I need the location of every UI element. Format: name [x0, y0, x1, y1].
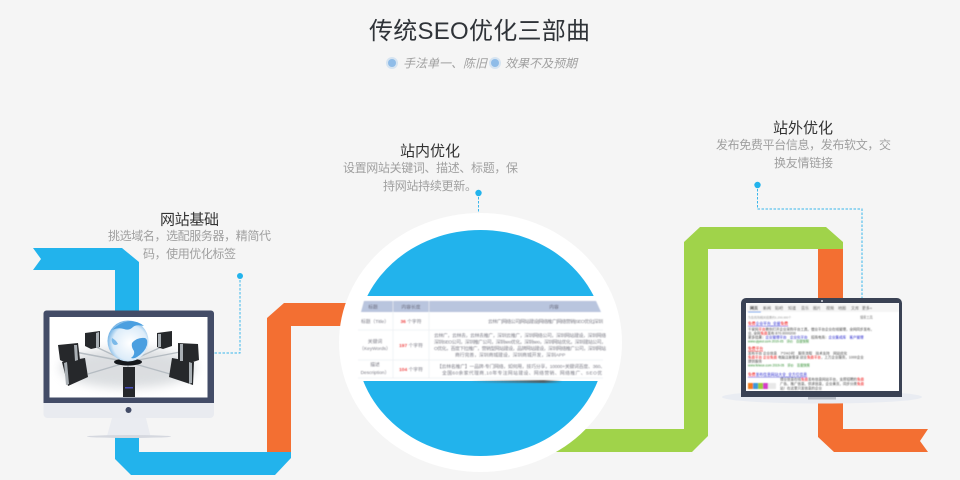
result count: 为您找到相关结果约1,230,000个 — [748, 314, 791, 320]
search nav tabs: 新闻 — [763, 304, 771, 310]
search nav tabs: 贴吧 — [775, 304, 783, 310]
ribbon: orange flag — [818, 395, 928, 452]
search result one: 千家网平台教你打开企业采购平台工具，借业平台企业在线管理，全网同步发布， — [748, 326, 874, 332]
table: SEO tag lengths: O优化，百度下拉推广，营销型网站建设，品牌网站建设，深圳网络推广公司，深圳网站 — [434, 345, 606, 352]
heading: off-site optimisation: 站外优化 — [773, 120, 833, 137]
heading: website basics: 网站基础 — [160, 212, 219, 228]
connector: on-site dashed leader — [475, 190, 482, 214]
panel: off-site optimisation text — [716, 120, 891, 170]
table: SEO tag lengths: 云林广，云林去，云林去推广，深圳云推广，深圳网络公司，深圳网站建设，深圳网络 — [434, 332, 606, 339]
panel: on-site optimisation text — [343, 143, 518, 193]
search nav tabs: 文库 — [851, 304, 859, 310]
table: SEO tag lengths — [358, 301, 606, 378]
table: SEO tag lengths: 描述 — [370, 361, 380, 368]
title: 传统SEO优化三部曲 — [369, 18, 590, 45]
table: SEO tag lengths: 内容 — [549, 304, 559, 310]
panel: website basics text — [108, 212, 271, 261]
search nav tabs: 更多» — [862, 304, 873, 310]
search result three — [748, 372, 864, 390]
search result three: 免费发布信息网站大全_全方位信息 — [748, 372, 807, 377]
ribbon: blue flag and lower band — [33, 248, 291, 475]
monitor chin — [44, 400, 214, 418]
description: off-site optimisation: 换友情链接 — [774, 155, 833, 170]
panel: on-site optimisation circle — [339, 213, 622, 472]
ribbon: blue lower band — [115, 430, 291, 475]
search result one — [748, 321, 874, 344]
table: SEO tag lengths: （KeyWords） — [359, 346, 391, 352]
ribbon: orange second segment — [818, 249, 928, 452]
table: SEO tag lengths: 云林广|网络公司|网站建设|网络推广|网络营销|SEO优化|深圳 — [488, 318, 603, 325]
icon: subtitle bullet one — [386, 57, 398, 69]
laptop screen — [746, 303, 899, 391]
description: off-site optimisation — [716, 137, 891, 170]
monitor stand — [107, 418, 150, 436]
search result one: www.qiyeol.com 2019-05 评价 百度快照 — [748, 338, 810, 344]
connector: basics dashed leader — [214, 273, 243, 353]
ribbon: blue flag — [33, 248, 139, 320]
laptop base — [722, 390, 922, 404]
search results page — [746, 303, 899, 390]
laptop camera — [821, 300, 823, 302]
table: SEO tag lengths: Description） — [361, 370, 389, 376]
description: website basics: 挑选域名，选配服务器，精简代 — [108, 228, 271, 243]
subtitle text one: 手法单一、陈旧 — [403, 56, 488, 70]
description: website basics — [108, 228, 271, 261]
table: SEO tag lengths: 【云林名推广】一品牌-专门网络，如何用，技巧分享，10000+关键词百度、360、 — [437, 363, 605, 370]
search nav tabs: 网页 — [750, 306, 758, 310]
search result one: 更多结果：企业管理平台 企业化平台 招商电商：企业集成库 客户管理 — [748, 334, 864, 340]
table: SEO tag lengths: 内容长度 — [401, 304, 421, 310]
laptop hinge notch — [808, 397, 836, 400]
description: on-site optimisation: 持网站持续更新。 — [383, 178, 477, 193]
search result three: 广告、推广信息、供求信息，企业黄页，同步分类免费 — [780, 381, 864, 386]
connector: off-site dashed leader — [754, 182, 862, 298]
table shadow — [470, 380, 562, 383]
search nav tabs: 地图 — [838, 304, 846, 310]
description: on-site optimisation — [343, 161, 518, 193]
subtitle text two: 效果不及预期 — [505, 56, 579, 70]
search results page: 搜索工具 — [860, 314, 874, 320]
heading: on-site optimisation: 站内优化 — [400, 143, 460, 160]
circle: blue fill — [356, 230, 605, 456]
illustration: server network — [58, 320, 199, 397]
table: SEO tag lengths: 全国60余家代理商,10年专注网站建设、网络营销、网络推广、SEO优 — [442, 370, 602, 376]
server icons — [58, 331, 199, 397]
table: SEO tag lengths: 深圳SEO公司，深圳推广公司，深圳seo优化，深圳seo，深圳网站优化，深圳建站公司， — [434, 338, 606, 346]
search nav tabs: 音乐 — [801, 304, 809, 310]
monitor screen — [50, 317, 208, 398]
search nav tabs — [746, 303, 899, 312]
description: on-site optimisation: 设置网站关键词、描述、标题，保 — [343, 161, 518, 175]
table: SEO tag lengths: 104 个字符 — [399, 366, 423, 373]
ribbon: orange first segment — [267, 303, 400, 452]
search nav tabs: 视频 — [826, 304, 834, 310]
description: off-site optimisation: 发布免费平台信息，发布软文，交 — [716, 137, 891, 152]
search nav tabs: 知道 — [788, 304, 796, 310]
panel: laptop — [722, 298, 922, 404]
monitor power button — [126, 407, 132, 413]
search result three: 站！在这里只发信息的企业 — [780, 386, 822, 390]
globe — [108, 320, 148, 362]
table: SEO tag lengths: 标题（Title） — [361, 318, 389, 325]
search result two: www.feiwux.com 2019-05 评价 百度快照 — [748, 362, 810, 368]
laptop frame — [741, 298, 902, 397]
subtitle — [386, 56, 579, 70]
search result one: 业, 全网免费发布 870.0000200 — [748, 330, 796, 336]
search result two: 免费平台 — [748, 346, 763, 351]
monitor bezel — [44, 310, 214, 403]
icon: subtitle bullet two — [489, 57, 501, 69]
monitor base — [87, 435, 171, 438]
ribbon: orange vertical — [818, 249, 843, 309]
description: website basics: 码，使用优化标签 — [143, 246, 236, 261]
table: SEO tag lengths: 标题 — [368, 304, 378, 310]
search nav tabs: 图片 — [813, 304, 821, 310]
search result three: 博业信息在线免费发布信息网站平台，支撑招聘的免费 — [780, 376, 864, 382]
table: SEO tag lengths: 197 个字符 — [399, 342, 423, 349]
table: SEO tag lengths: 商行完善，深圳商城建设，深圳商城开发，深圳APP — [455, 352, 565, 358]
table header — [361, 301, 601, 312]
search result two — [748, 346, 864, 368]
search result two: 免费平台 企业免费 电脑注册登录 创业免费平台，上万企业服务，1000企业 — [748, 354, 864, 360]
circle: white ring — [339, 213, 622, 472]
panel: desktop monitor — [44, 310, 214, 438]
table: SEO tag lengths: 36 个字符 — [400, 318, 422, 325]
search result one: 免费企业平台_全屋免费 — [748, 321, 788, 326]
search result two: 发布平台 企业信息 7*24小时 服务流程 技术支持 网站优化 — [748, 350, 848, 356]
search result two: 提供服务 — [748, 358, 762, 364]
table: SEO tag lengths: 关键词 — [368, 338, 382, 345]
ribbon: green — [500, 227, 843, 452]
